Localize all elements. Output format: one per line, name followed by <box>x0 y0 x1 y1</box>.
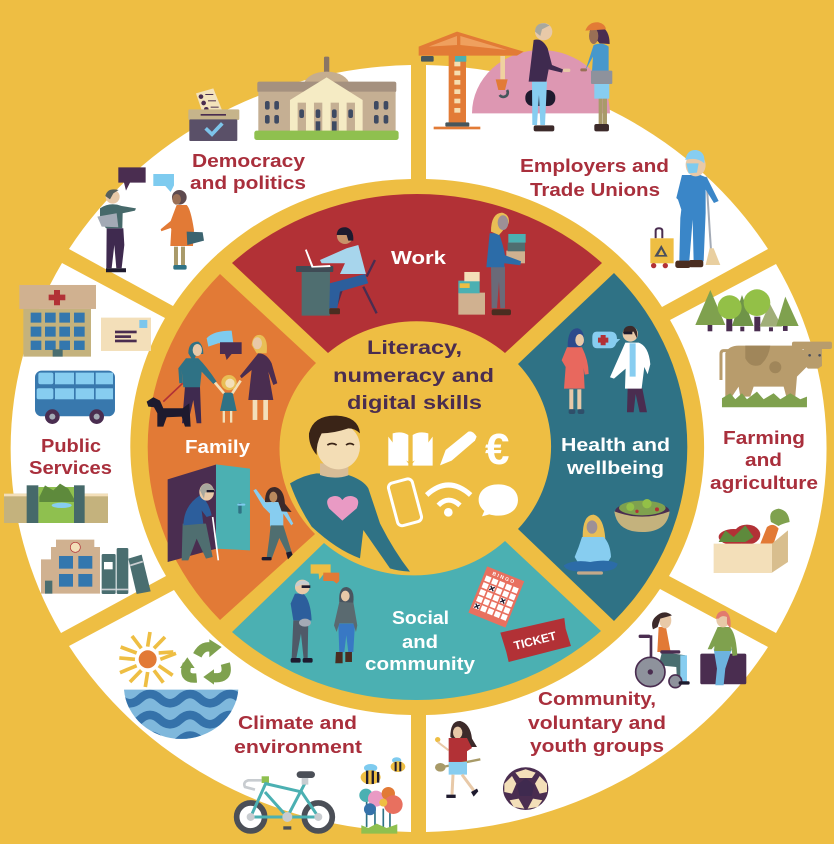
label: Community, voluntary and youth groups: youth groups <box>530 735 664 756</box>
label: Work: Work <box>391 247 447 268</box>
label: Farming and agriculture: Farming <box>723 427 805 448</box>
icon: euro sign: € <box>485 425 509 474</box>
icon: ballot box <box>188 88 239 141</box>
icon: crane <box>419 32 524 129</box>
icon: pencil <box>440 431 477 465</box>
label: Community, voluntary and youth groups <box>528 688 666 756</box>
icon: person at desk with laptop <box>296 227 377 316</box>
label: Social and community: community <box>365 653 476 674</box>
icon: wifi <box>427 485 471 517</box>
label: Literacy, numeracy and digital skills: numeracy and <box>333 365 494 387</box>
icon: recycling arrows <box>180 639 226 685</box>
icon: open book <box>388 432 433 466</box>
panel: Public Services <box>4 263 166 633</box>
icon: envelope <box>101 318 151 351</box>
icon: bingo card <box>468 566 524 628</box>
icon: two people with speech bubbles <box>291 564 357 663</box>
icon: double decker bus <box>35 371 115 424</box>
icon: patient and doctor <box>562 326 650 414</box>
icon: sun <box>119 632 176 687</box>
icon: woman meditating <box>564 515 618 575</box>
label: Farming and agriculture: and <box>745 449 782 470</box>
label: Health and wellbeing: wellbeing <box>566 457 664 478</box>
icon: bees and flowers <box>359 757 405 834</box>
panel: Employers and Trade Unions <box>419 22 768 307</box>
icon: two people talking <box>97 167 204 272</box>
icon: pink dome <box>472 50 610 113</box>
centre: Literacy, numeracy and digital skills <box>290 337 518 572</box>
wedge: Family <box>147 274 316 620</box>
icon: cleaner with mop and bucket <box>650 150 720 268</box>
panel: Farming and agriculture <box>669 264 832 633</box>
label: Public Services <box>29 435 112 478</box>
icon: vegetable crate <box>714 509 790 573</box>
panel: Community, voluntary and youth groups <box>426 589 768 832</box>
icon: handshake figures <box>525 22 612 131</box>
icon: smartphone <box>387 478 423 527</box>
label: Employers and Trade Unions: Employers and <box>520 155 669 176</box>
icon: salad bowl <box>614 499 670 532</box>
label: Climate and environment: environment <box>234 736 362 757</box>
panel: Climate and environment <box>69 590 411 834</box>
label: Literacy, numeracy and digital skills: digital skills <box>347 392 482 414</box>
wedge: Work <box>232 194 602 353</box>
icon: door with old man and girl <box>168 464 293 562</box>
wedge: Health and wellbeing <box>518 273 687 621</box>
figure: person with heart <box>290 416 410 572</box>
wedge: Social and community <box>232 541 601 700</box>
icon: park gate <box>4 484 108 523</box>
label: Public Services: Services <box>29 457 112 478</box>
icon: family group with dog <box>147 331 277 427</box>
label: Farming and agriculture: agriculture <box>710 472 818 493</box>
icon: football <box>503 767 548 810</box>
panel: Democracy and politics <box>69 57 411 306</box>
icon: ticket: TICKET <box>512 629 558 653</box>
label: Community, voluntary and youth groups: voluntary and <box>528 712 666 733</box>
icon: woman carrying boxes <box>458 213 526 315</box>
label: Social and community: Social <box>392 607 449 628</box>
icon: hospital <box>19 285 96 357</box>
label: Employers and Trade Unions: Trade Unions <box>530 179 660 200</box>
icon: girl with hurley <box>435 721 480 798</box>
icon: ticket <box>500 618 571 662</box>
label: Climate and environment <box>234 712 362 757</box>
label: Democracy and politics <box>190 150 306 193</box>
icon: person sitting on bench <box>700 611 746 685</box>
label: Democracy and politics: and politics <box>190 172 306 193</box>
icon: bicycle <box>237 771 332 831</box>
icon: water <box>124 690 238 739</box>
label: Farming and agriculture <box>710 427 818 493</box>
icon: bingo card: BINGO <box>491 571 516 586</box>
icon: speech bubble <box>479 484 518 516</box>
label: Employers and Trade Unions <box>520 155 669 200</box>
icon: wheelchair user <box>636 612 690 688</box>
icon: cow <box>721 342 832 407</box>
label: Health and wellbeing: Health and <box>561 434 670 455</box>
icon: school and books <box>41 540 151 594</box>
label: Literacy, numeracy and digital skills: Literacy, <box>367 337 462 359</box>
label: Community, voluntary and youth groups: Community, <box>538 688 656 709</box>
icon: parliament building <box>254 57 399 140</box>
label: Climate and environment: Climate and <box>238 712 357 733</box>
label: Social and community: and <box>402 631 438 652</box>
label: Literacy, numeracy and digital skills <box>333 337 494 414</box>
label: Public Services: Public <box>41 435 101 456</box>
icon: trees <box>695 289 799 331</box>
label: Democracy and politics: Democracy <box>192 150 306 171</box>
label: Social and community <box>365 607 476 674</box>
label: Health and wellbeing <box>561 434 670 478</box>
label: Family: Family <box>185 436 251 457</box>
